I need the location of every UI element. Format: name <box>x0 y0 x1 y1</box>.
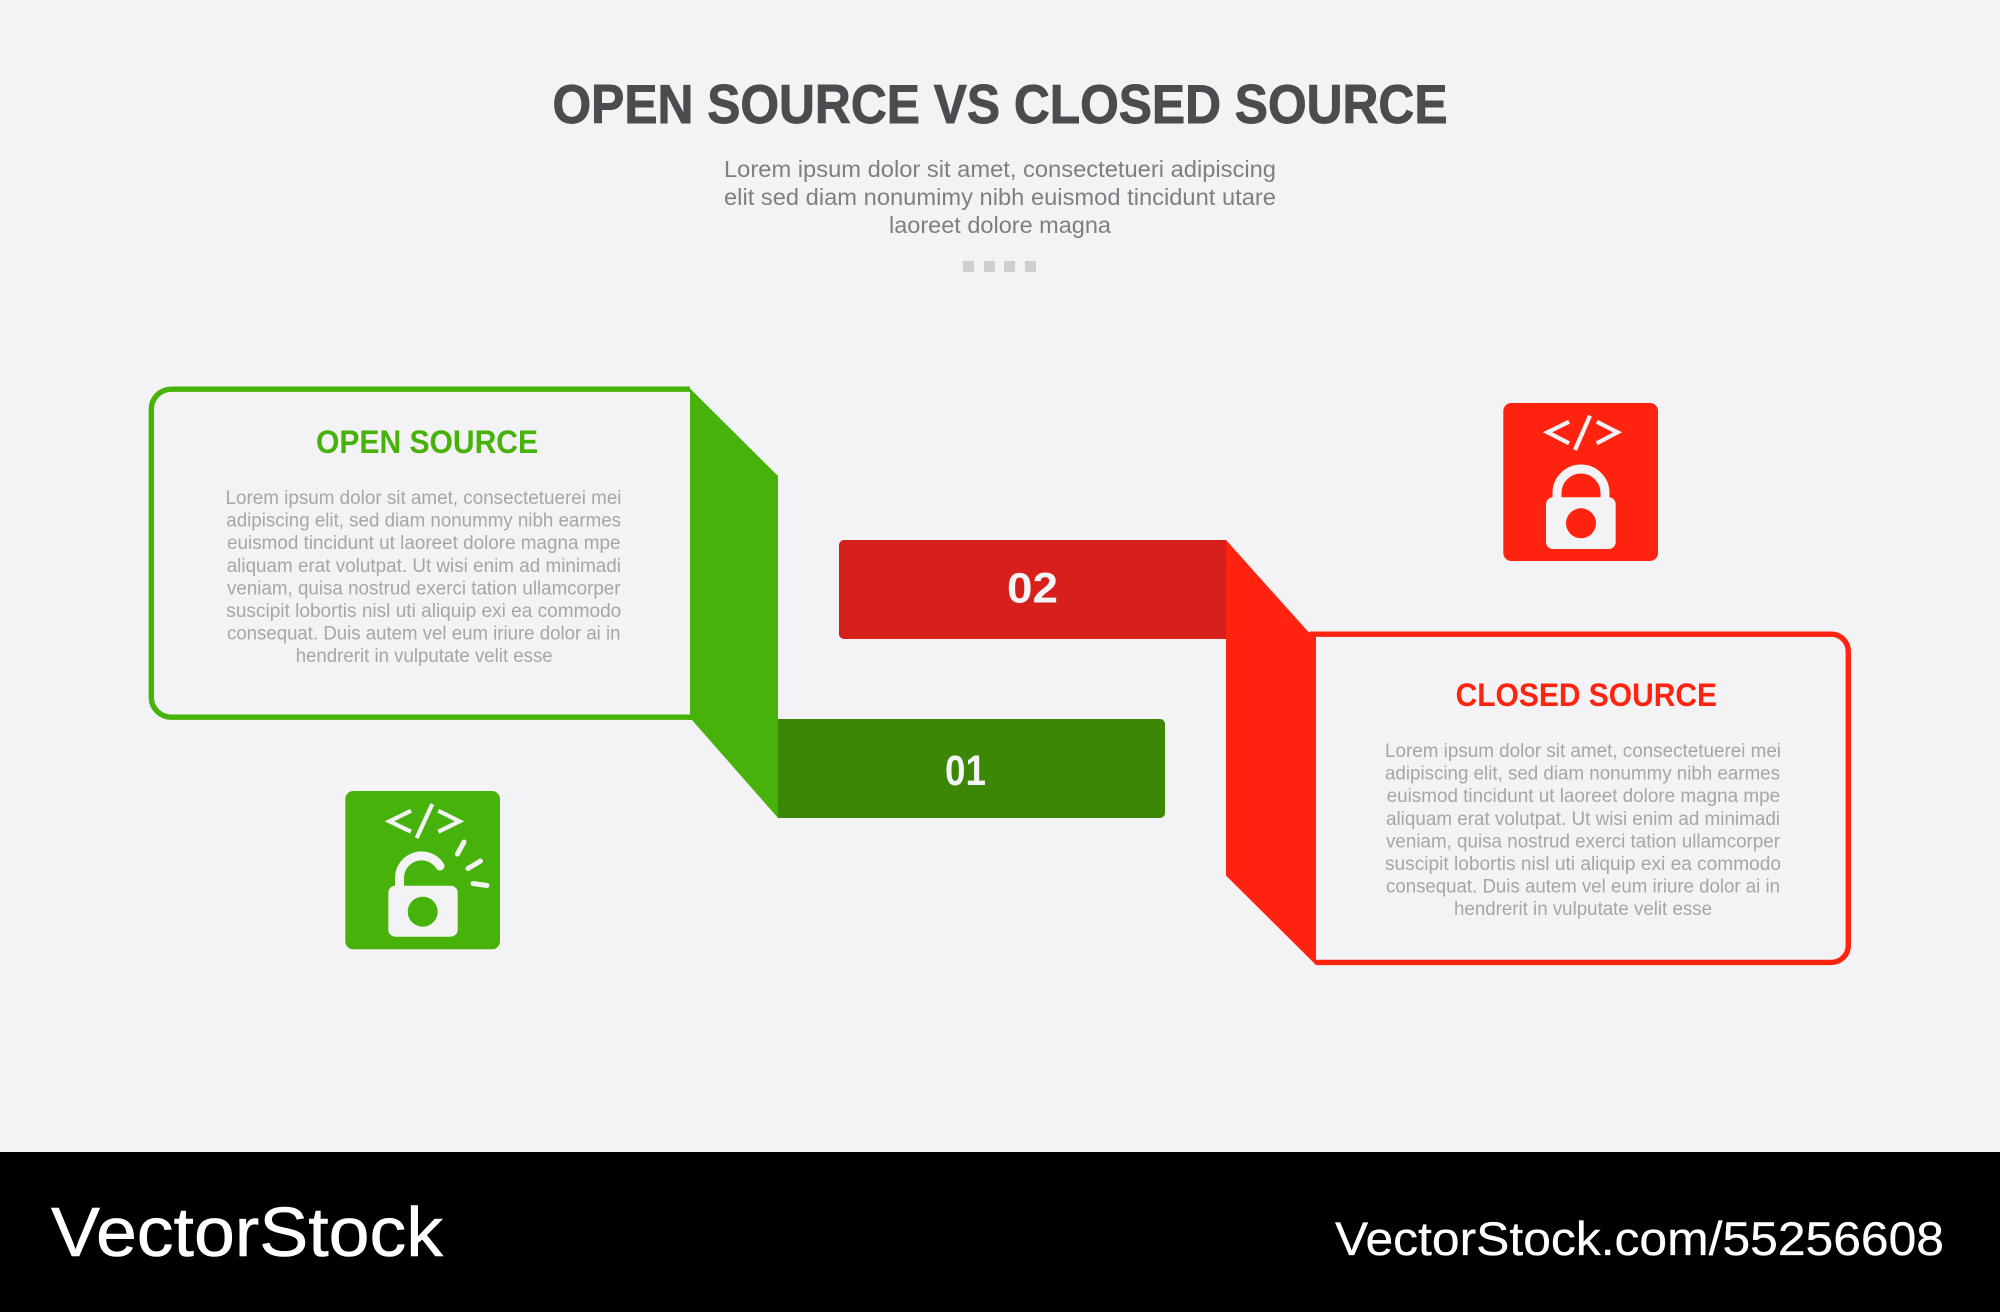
icon: closed padlock with code brackets <box>1503 403 1658 561</box>
open source body text: consequat. Duis autem vel eum iriure dolor ai in <box>227 624 620 645</box>
open source body text: adipiscing elit, sed diam nonummy nibh earmes <box>226 511 621 532</box>
open source dark green number bar <box>778 719 1165 818</box>
open source body text: aliquam erat volutpat. Ut wisi enim ad minimadi <box>227 556 621 577</box>
open source body text: suscipit lobortis nisl uti aliquip exi ea commodo <box>226 601 621 622</box>
panel: open source <box>151 386 1165 818</box>
closed source body text: adipiscing elit, sed diam nonummy nibh earmes <box>1385 764 1780 785</box>
title divider dots <box>963 261 1036 272</box>
open source dark green number bar: 01 <box>945 747 986 795</box>
open source body text: hendrerit in vulputate velit esse <box>296 646 553 667</box>
closed source body text: hendrerit in vulputate velit esse <box>1454 899 1712 920</box>
closed source dark red number bar: 02 <box>1007 564 1058 612</box>
panel: closed source <box>839 540 1848 965</box>
open source body text: veniam, quisa nostrud exerci tation ullamcorper <box>227 578 621 599</box>
footer band <box>0 1152 2000 1312</box>
subtitle text block: laoreet dolore magna <box>889 212 1112 238</box>
open source folded ribbon <box>688 386 778 818</box>
closed source outlined box <box>1310 634 1848 962</box>
title: OPEN SOURCE VS CLOSED SOURCE <box>552 73 1448 135</box>
footer logo wordmark: VectorStock <box>51 1193 444 1271</box>
subtitle text block <box>724 156 1276 238</box>
closed source body text <box>1385 741 1781 920</box>
closed source heading: CLOSED SOURCE <box>1456 677 1717 713</box>
open source body text: Lorem ipsum dolor sit amet, consectetuerei mei <box>226 488 622 509</box>
closed source body text: euismod tincidunt ut laoreet dolore magna mpe <box>1387 786 1780 807</box>
open source body text: euismod tincidunt ut laoreet dolore magna mpe <box>227 533 620 554</box>
closed source body text: aliquam erat volutpat. Ut wisi enim ad minimadi <box>1386 809 1780 830</box>
subtitle text block: elit sed diam nonumimy nibh euismod tincidunt utare <box>724 184 1276 210</box>
closed source body text: consequat. Duis autem vel eum iriure dolor ai in <box>1386 877 1780 898</box>
subtitle text block: Lorem ipsum dolor sit amet, consectetueri adipiscing <box>724 156 1276 182</box>
closed source dark red number bar <box>839 540 1226 639</box>
open source body text <box>226 488 622 667</box>
open source outlined box <box>151 389 690 717</box>
closed source folded ribbon <box>1226 540 1316 965</box>
icon: open padlock with code brackets <box>345 791 500 949</box>
closed source body text: suscipit lobortis nisl uti aliquip exi ea commodo <box>1385 854 1781 875</box>
footer image url: VectorStock.com/55256608 <box>1335 1212 1944 1265</box>
open source heading: OPEN SOURCE <box>316 424 538 460</box>
closed source body text: Lorem ipsum dolor sit amet, consectetuerei mei <box>1385 741 1781 762</box>
closed source body text: veniam, quisa nostrud exerci tation ullamcorper <box>1386 831 1781 852</box>
